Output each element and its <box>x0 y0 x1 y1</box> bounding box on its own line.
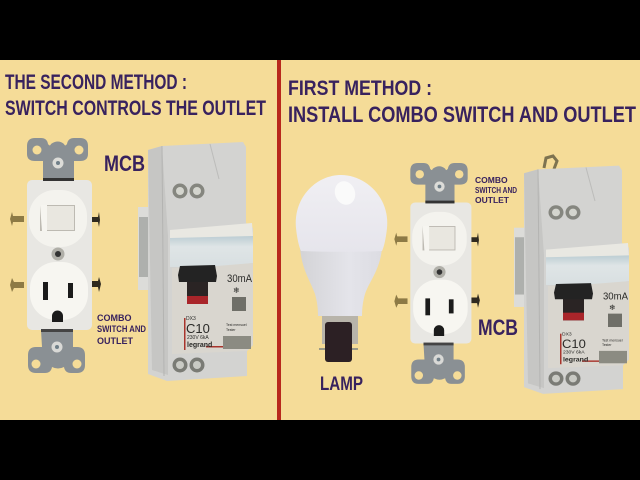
MCB markings: 30mA <box>603 291 629 302</box>
label: combo switch and outlet: COMBO <box>97 313 132 323</box>
MCB markings: Tester <box>602 343 612 347</box>
label: combo switch and outlet <box>475 175 517 205</box>
MCB markings: legrand <box>563 357 588 363</box>
MCB markings: 230V 6kA <box>563 350 585 356</box>
icon: combo switch and outlet <box>10 138 101 373</box>
label: combo switch and outlet: SWITCH AND <box>97 324 146 334</box>
icon: top hook of breaker <box>544 156 557 169</box>
label: MCB: MCB <box>104 151 145 176</box>
heading: first method: FIRST METHOD : <box>288 77 432 100</box>
MCB markings: Test mensuel <box>226 323 247 327</box>
MCB markings: ❄ <box>609 303 616 312</box>
panel: first method <box>288 77 636 395</box>
MCB markings: 30mA <box>227 273 253 285</box>
label: LAMP: LAMP <box>320 374 363 395</box>
panel: second method <box>5 71 266 381</box>
MCB markings: ❄ <box>233 286 240 295</box>
MCB markings: DX3 <box>562 332 572 338</box>
label: combo switch and outlet: SWITCH AND <box>475 185 517 195</box>
MCB markings: DX3 <box>186 316 196 322</box>
icon: combo switch and outlet <box>394 163 480 384</box>
MCB markings: 230V 6kA <box>187 335 209 341</box>
icon: miniature circuit breaker <box>138 142 253 381</box>
label: combo switch and outlet <box>97 313 146 346</box>
MCB markings: legrand <box>187 342 212 349</box>
icon: lamp <box>296 175 387 362</box>
MCB markings: C10 <box>186 321 210 336</box>
MCB markings: Test mensuel <box>602 338 623 342</box>
label: combo switch and outlet: OUTLET <box>97 336 133 346</box>
heading: second method: THE SECOND METHOD : <box>5 71 187 94</box>
heading: second method: SWITCH CONTROLS THE OUTLET <box>5 97 266 120</box>
icon: miniature circuit breaker <box>514 166 629 394</box>
MCB markings <box>186 273 253 349</box>
heading: first method <box>288 77 636 127</box>
label: combo switch and outlet: OUTLET <box>475 195 510 205</box>
MCB markings: C10 <box>562 336 586 351</box>
heading: second method <box>5 71 266 120</box>
MCB markings: Tester <box>226 328 236 332</box>
label: MCB: MCB <box>478 315 518 340</box>
MCB markings <box>562 291 629 363</box>
label: combo switch and outlet: COMBO <box>475 175 508 185</box>
